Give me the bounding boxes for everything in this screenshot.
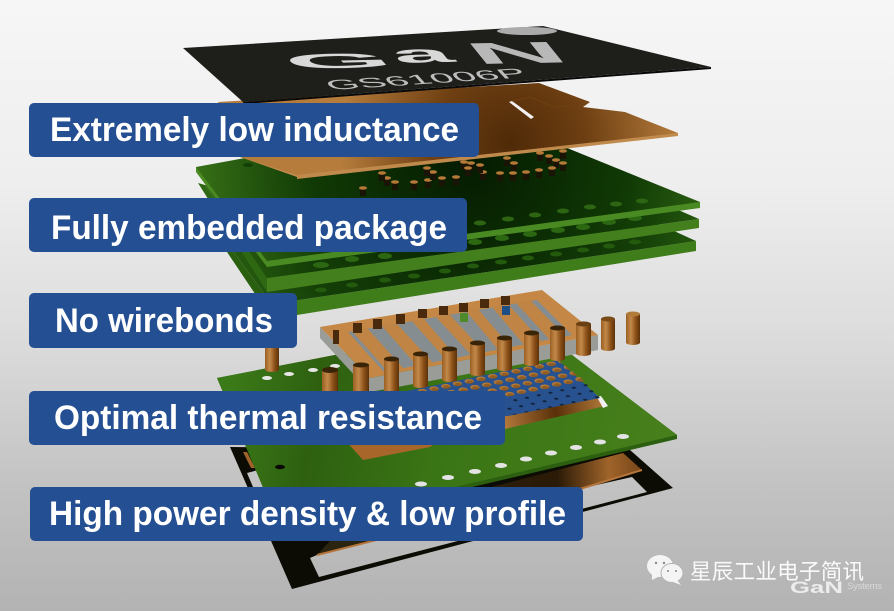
label: High power density & low profile <box>30 487 583 541</box>
layer: bottom black frame <box>230 447 673 589</box>
frame window front <box>310 477 647 577</box>
GaN Systems watermark logo: GaN <box>790 578 843 597</box>
solder bumps under top copper <box>359 149 567 196</box>
pillar behind left <box>265 340 279 372</box>
watermark account name: 星辰工业电子简讯 <box>690 560 864 584</box>
label: Optimal thermal resistance: Optimal thermal resistance <box>54 399 482 437</box>
chip part number: GS61006P <box>321 66 532 93</box>
holes <box>315 240 641 292</box>
label: Extremely low inductance <box>29 103 479 157</box>
green layer 3 <box>227 170 696 319</box>
layer: lower green board <box>217 353 677 532</box>
bottom copper plate <box>317 453 642 555</box>
back-left holes <box>262 364 340 380</box>
holes <box>243 163 648 226</box>
chip GaN logo <box>275 35 577 73</box>
icon: wechat watermark <box>647 555 683 585</box>
GaN Systems watermark logo <box>790 578 882 597</box>
top black chip <box>183 26 711 104</box>
frame window left <box>247 470 270 487</box>
front holes <box>415 434 629 486</box>
slot in copper plate <box>509 101 534 119</box>
blue thermal plate with copper dots <box>402 360 600 420</box>
copper strips <box>352 300 566 372</box>
label: Fully embedded package <box>29 198 467 252</box>
GaN Systems watermark logo: Systems <box>847 581 882 592</box>
holes <box>313 215 642 268</box>
label: Optimal thermal resistance <box>29 391 505 445</box>
green layer 2 <box>198 150 699 292</box>
chip package tray <box>320 290 598 392</box>
chip GaN logo: G <box>275 48 401 73</box>
copper slug under blue plate <box>345 394 608 460</box>
vias <box>333 296 510 344</box>
chip GaN logo: a <box>381 40 462 68</box>
green layer 1 <box>196 137 700 267</box>
label: No wirebonds: No wirebonds <box>55 302 273 340</box>
label: Fully embedded package: Fully embedded package <box>51 209 447 247</box>
label: No wirebonds <box>29 293 297 348</box>
chip pin-1 dot <box>497 27 557 35</box>
chip GaN logo: N <box>456 35 577 71</box>
black mounting hole <box>275 465 285 469</box>
copper pillars row <box>322 312 640 399</box>
label: Extremely low inductance: Extremely low inductance <box>50 111 459 149</box>
label: High power density & low profile: High power density & low profile <box>49 495 566 533</box>
top copper plate <box>218 83 678 179</box>
